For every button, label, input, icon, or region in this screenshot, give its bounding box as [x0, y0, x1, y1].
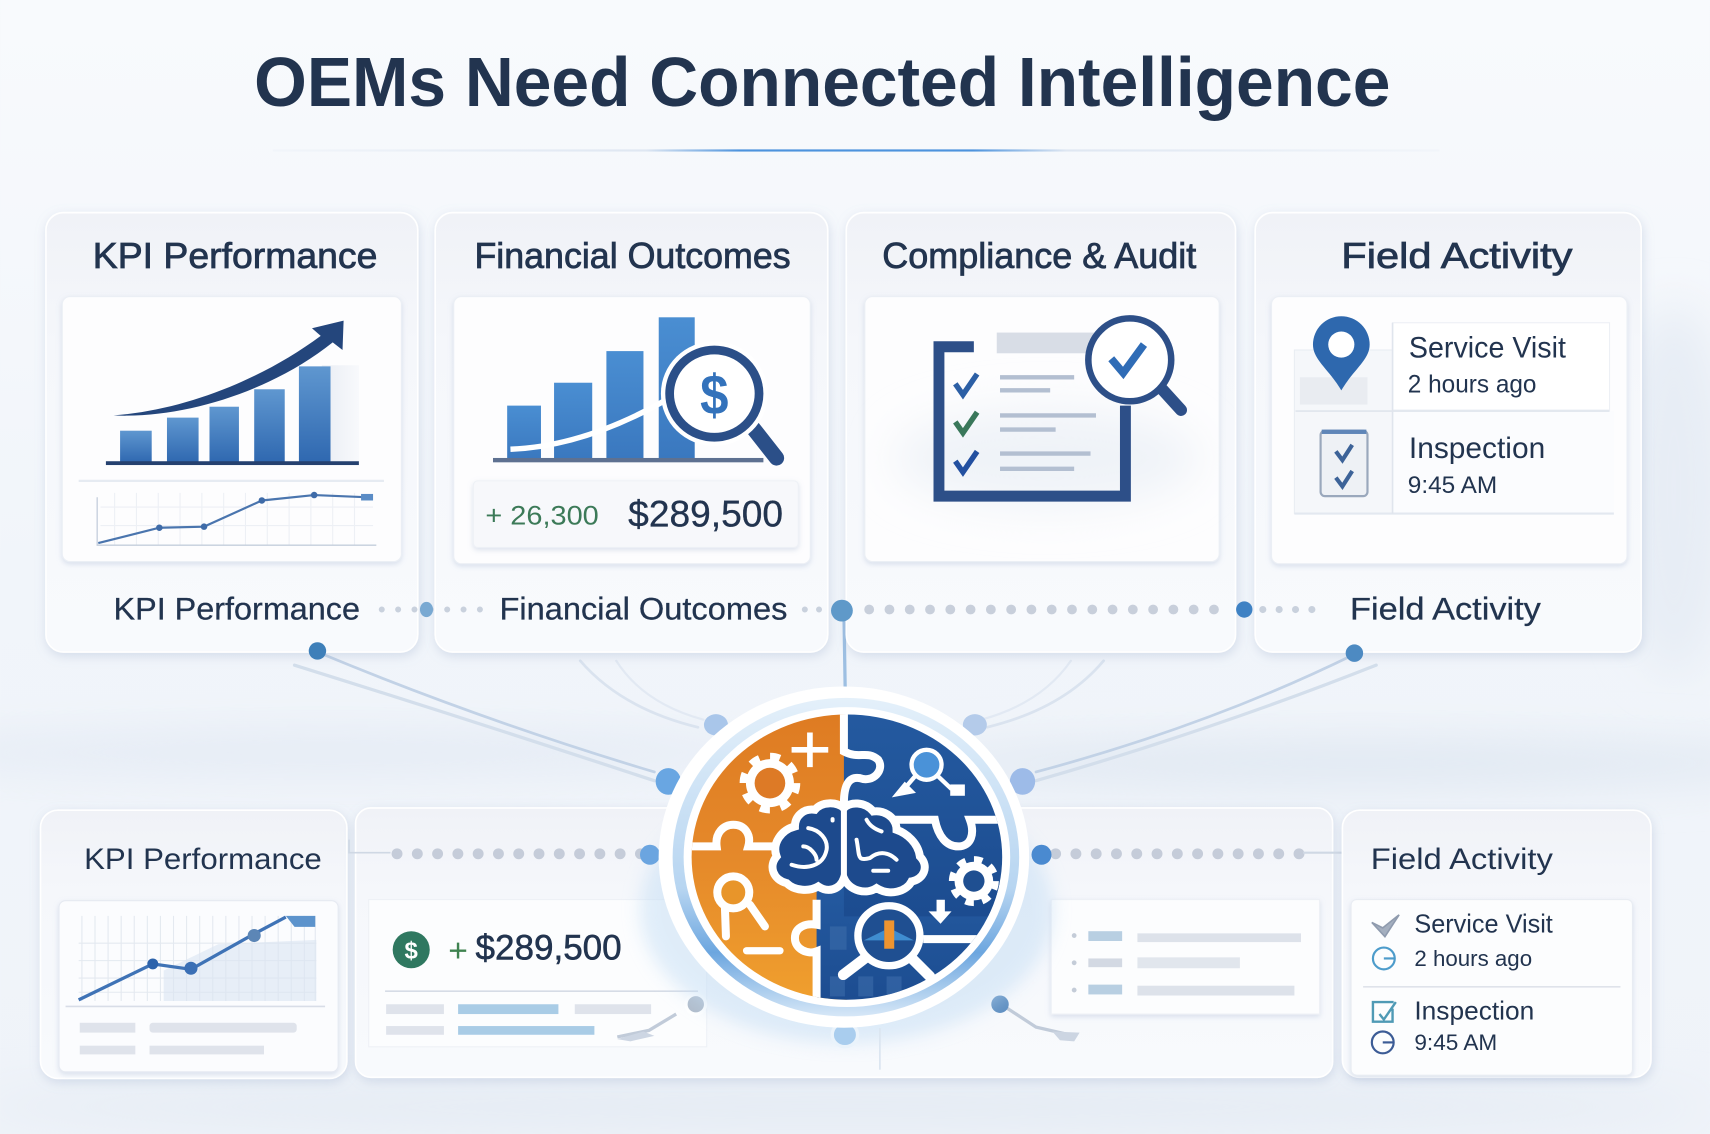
clipboard checklist with magnifier — [894, 318, 1200, 507]
inner list card — [1351, 900, 1632, 1075]
dotted connector right — [1056, 853, 1343, 854]
panel: bottom center — [349, 808, 1343, 1077]
satellite nodes — [640, 714, 1052, 1047]
faint bars in lower blue — [830, 926, 902, 996]
label: Field Activity: Field Activity — [1350, 590, 1541, 626]
inner illustration card — [865, 297, 1219, 562]
inner card: list — [1051, 900, 1320, 1014]
text: Inspection: Inspection — [1414, 996, 1534, 1026]
icon: down arrow — [929, 900, 952, 924]
icon: location pin — [1313, 316, 1370, 390]
bar chart with dollar magnifier: $ — [700, 364, 729, 427]
stat box: + 26,300 — [485, 499, 599, 530]
text: Inspection: Inspection — [1409, 432, 1545, 465]
text: Service Visit: Service Visit — [1409, 332, 1566, 365]
heading: Field Activity: Field Activity — [1371, 843, 1553, 876]
label: Financial Outcomes: Financial Outcomes — [500, 590, 787, 626]
dotted connector: upper row — [309, 600, 1363, 662]
inner chart card — [62, 297, 401, 562]
panel: Financial Outcomes — [435, 213, 828, 652]
label: KPI Performance: KPI Performance — [114, 590, 360, 626]
panel: Field Activity — [1255, 213, 1641, 652]
stat box — [473, 481, 798, 547]
stat box: $289,500 — [628, 493, 783, 535]
icon: gray check — [1372, 915, 1399, 937]
value: +$289,500: + — [448, 932, 468, 969]
node trail — [617, 994, 706, 1041]
icon: key search — [717, 876, 780, 951]
text: Service Visit: Service Visit — [1414, 908, 1554, 938]
bar chart with rising arrow — [106, 321, 359, 465]
bottom stem — [877, 1028, 882, 1070]
blue quadrant — [816, 884, 1000, 1000]
puzzle disc — [687, 710, 1011, 1006]
central hub emblem — [640, 686, 1053, 1070]
icon: checkbox — [1373, 1002, 1396, 1022]
heading: Compliance & Audit: Compliance & Audit — [882, 235, 1196, 276]
activity table — [1294, 316, 1614, 514]
title underline — [273, 149, 1439, 152]
text: 9:45 AM: 9:45 AM — [1414, 1030, 1497, 1055]
heading: Financial Outcomes: Financial Outcomes — [474, 235, 791, 276]
text: 2 hours ago: 2 hours ago — [1408, 371, 1536, 399]
icon: checklist — [1321, 430, 1367, 496]
line chart — [79, 481, 384, 545]
bar chart with dollar magnifier — [493, 317, 776, 462]
panel: Compliance & Audit — [846, 213, 1236, 652]
connector lines to hub — [295, 622, 1376, 781]
node trail right — [991, 996, 1080, 1041]
heading: KPI Performance: KPI Performance — [93, 235, 377, 276]
inner list card — [1272, 297, 1627, 564]
brain — [773, 803, 925, 892]
pin hole — [1328, 331, 1354, 358]
panel: bottom Field Activity — [1342, 810, 1651, 1077]
icon: blue gear — [952, 859, 996, 903]
puzzle seams — [690, 710, 1007, 1003]
panel: bottom KPI Performance — [40, 810, 347, 1078]
icon: orange gear — [743, 756, 797, 810]
heading: Field Activity: Field Activity — [1341, 235, 1572, 276]
blue upper right — [844, 710, 1011, 916]
inner chart card — [454, 297, 810, 564]
heading: KPI Performance: KPI Performance — [84, 843, 322, 876]
inner card: financial — [369, 900, 707, 1047]
icon: magnifier — [843, 906, 930, 976]
inner card — [59, 901, 338, 1072]
icon: clock — [1372, 1032, 1394, 1053]
icon: clock — [1373, 948, 1395, 969]
hub glow — [640, 776, 1053, 1043]
placeholder rows — [80, 1023, 297, 1054]
value: +$289,500: $289,500 — [476, 929, 622, 968]
dotted connector left — [349, 840, 643, 854]
icon: dollar coin: $ — [405, 937, 418, 964]
icon: network node — [897, 750, 965, 795]
outer rings — [659, 686, 1029, 1028]
icon: plus — [792, 732, 828, 767]
title: OEMs Need Connected Intelligence — [254, 43, 1390, 121]
placeholder rows — [386, 1004, 651, 1035]
panel: KPI Performance — [46, 213, 418, 652]
text: 9:45 AM: 9:45 AM — [1408, 472, 1497, 499]
icon: dollar coin — [393, 931, 430, 968]
text: 2 hours ago: 2 hours ago — [1414, 946, 1532, 971]
orange quadrant — [687, 710, 847, 1006]
trend line chart — [66, 916, 325, 1006]
